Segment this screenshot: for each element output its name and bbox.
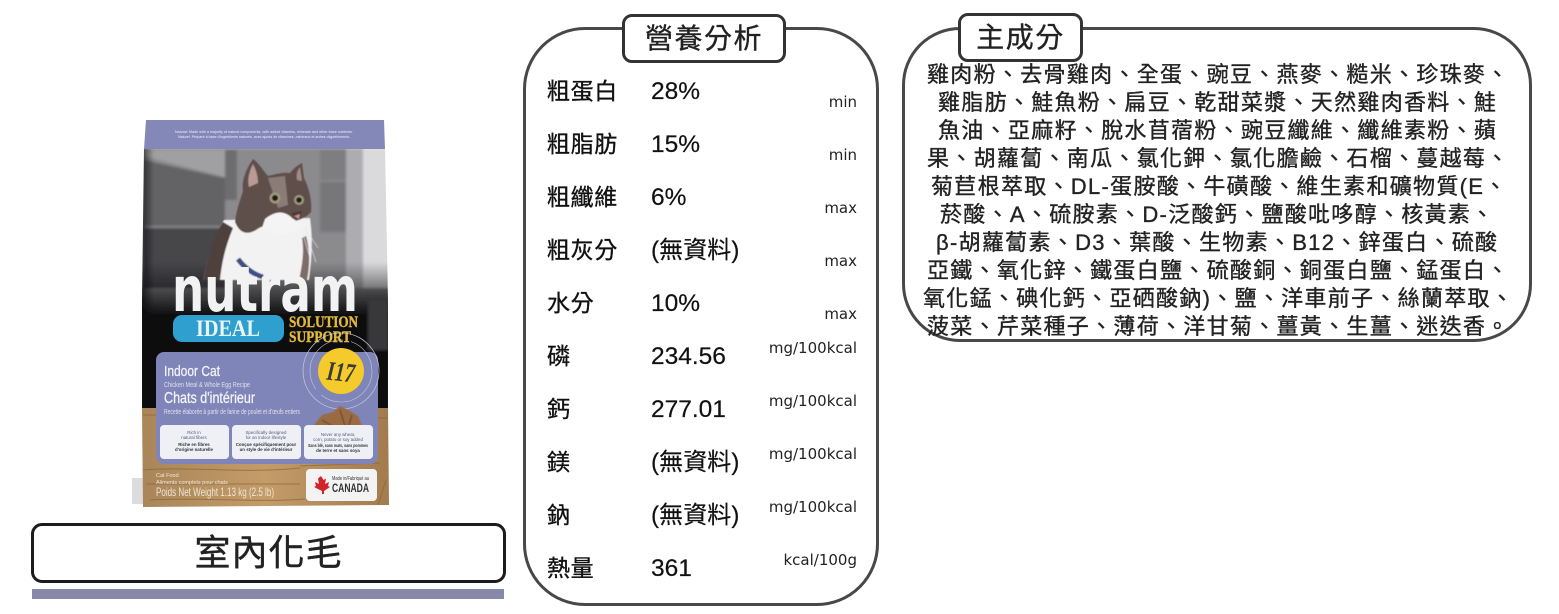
ingredients text	[923, 62, 1514, 339]
row: protein	[547, 78, 857, 111]
solution support: SOLUTION	[289, 314, 358, 331]
recipe panel: Indoor Cat	[164, 363, 221, 380]
row: ash: (無資料)	[651, 237, 739, 264]
made in Canada label: CANADA	[332, 481, 369, 495]
ingredients text: β-胡蘿蔔素、D3、葉酸、生物素、B12、鋅蛋白、硫酸	[936, 230, 1498, 255]
made in Canada label	[306, 469, 377, 501]
ingredients text: 菸酸、A、硫胺素、D-泛酸鈣、鹽酸吡哆醇、核黃素、	[940, 202, 1494, 227]
row: fiber: 粗纖維	[547, 184, 618, 210]
benefit cards: d'origine naturelle	[175, 447, 213, 452]
I17 badge: I17	[325, 356, 357, 388]
row: ash: max	[824, 252, 857, 270]
row: moisture: max	[824, 305, 857, 323]
product name box	[31, 523, 506, 583]
row: moisture: 10%	[651, 290, 700, 317]
benefit cards: corn, potato or soy added	[313, 437, 363, 442]
benefit cards: Specifically designed	[245, 430, 287, 435]
ingredients text: 氧化錳、碘化鈣、亞硒酸鈉)、鹽、洋車前子、絲蘭萃取、	[923, 286, 1514, 311]
row: fat: 15%	[651, 131, 700, 158]
photo background	[140, 148, 390, 414]
recipe panel: Chats d'intérieur	[164, 390, 256, 407]
purple bar under name	[32, 589, 504, 599]
row: calories: kcal/100g	[784, 551, 857, 569]
row: fat	[547, 131, 857, 164]
panel outline	[902, 27, 1532, 342]
benefit cards: natural fibers	[181, 435, 207, 440]
ingredients text: 果、胡蘿蔔、南瓜、氯化鉀、氯化膽鹼、石榴、蔓越莓、	[927, 146, 1510, 171]
heading: nutrition analysis	[622, 14, 786, 63]
row: fiber	[547, 184, 857, 217]
product bag illustration	[132, 120, 389, 507]
top purple band: Natural: Made with a majority of natural components, with added vitamins, minerals and other trace nutrients.	[175, 130, 353, 134]
ingredients text: 魚油、亞麻籽、脫水苜蓿粉、豌豆纖維、纖維素粉、蘋	[938, 118, 1497, 143]
ingredients text: 雞肉粉、去骨雞肉、全蛋、豌豆、燕麥、糙米、珍珠麥、	[927, 62, 1510, 87]
panel outline	[523, 27, 879, 606]
benefit cards: Conçue spécifiquement pour	[236, 442, 297, 447]
row: fat: min	[829, 146, 857, 164]
row: sodium: (無資料)	[651, 502, 739, 529]
row: phosphorus: 磷	[547, 343, 571, 369]
row: phosphorus: 234.56	[651, 343, 726, 370]
heading: main ingredients: 主成分	[976, 22, 1065, 53]
row: calcium: 鈣	[547, 396, 571, 422]
ingredients text: 菊苣根萃取、DL-蛋胺酸、牛磺酸、維生素和礦物質(E、	[931, 174, 1508, 199]
row: protein: 28%	[651, 78, 700, 105]
I17 badge	[303, 333, 379, 409]
row: fiber: max	[824, 199, 857, 217]
wood base	[142, 408, 389, 507]
net weight text: Cat Food	[156, 473, 179, 479]
row: fiber: 6%	[651, 184, 686, 211]
ingredients text: 亞鐵、氧化鋅、鐵蛋白鹽、硫酸銅、銅蛋白鹽、錳蛋白、	[927, 258, 1510, 283]
benefit cards: de terre et sans soya	[316, 448, 360, 453]
panel: nutrition analysis	[523, 14, 879, 606]
panel: main ingredients	[902, 13, 1532, 342]
benefit cards	[160, 425, 373, 459]
kibble	[314, 406, 363, 432]
IDEAL pill	[173, 315, 284, 342]
row: magnesium: 鎂	[547, 449, 571, 475]
row: moisture: 水分	[547, 290, 594, 316]
benefit cards: Rich in	[187, 430, 201, 435]
product name box: 室內化毛	[194, 532, 342, 573]
row: moisture	[547, 290, 857, 323]
top purple band: Naturel: Préparé à base d'ingrédients naturels, avec ajouts de vitamines, minéraux et autres oligoéléments.	[178, 135, 350, 139]
benefit cards: Sans blé, sans maïs, sans pommes	[308, 443, 368, 448]
row: protein: 粗蛋白	[547, 78, 618, 104]
row: phosphorus: mg/100kcal	[769, 339, 857, 357]
row: calcium	[547, 392, 857, 423]
row: sodium	[547, 498, 857, 529]
IDEAL pill: IDEAL	[196, 316, 260, 341]
row: ash: 粗灰分	[547, 237, 618, 263]
row: sodium: 鈉	[547, 502, 571, 528]
benefit cards: Riche en fibres	[178, 442, 210, 447]
recipe panel	[156, 352, 378, 464]
net weight text: Aliments complets pour chats	[156, 480, 228, 486]
row: calories: 361	[651, 555, 692, 582]
heading: nutrition analysis: 營養分析	[645, 23, 763, 54]
cat	[203, 159, 318, 280]
benefit cards: un style de vie d'intérieur	[240, 447, 293, 452]
benefit cards: for an indoor lifestyle	[246, 435, 287, 440]
row: ash	[547, 237, 857, 270]
solution support	[289, 314, 358, 346]
ingredients text: 雞脂肪、鮭魚粉、扁豆、乾甜菜漿、天然雞肉香料、鮭	[938, 90, 1497, 115]
row: calories: 熱量	[547, 555, 594, 581]
benefit cards: Never any wheat,	[321, 432, 355, 437]
net weight text	[156, 473, 274, 499]
recipe panel: Recette élaborée à partir de farine de poulet et d'œufs entiers	[164, 409, 300, 416]
row: phosphorus	[547, 339, 857, 370]
row: magnesium: (無資料)	[651, 449, 739, 476]
row: calcium: 277.01	[651, 396, 726, 423]
heading: main ingredients	[958, 13, 1083, 62]
row: magnesium	[547, 445, 857, 476]
made in Canada label: Made in/Fabriqué au	[332, 476, 369, 482]
solution support: SUPPORT	[289, 329, 351, 346]
net weight text: Poids Net Weight 1.13 kg (2.5 lb)	[156, 485, 274, 499]
shadow at bag left	[132, 478, 144, 504]
row: fat: 粗脂肪	[547, 131, 618, 157]
row: calories	[547, 551, 857, 582]
top purple band	[144, 120, 385, 149]
row: sodium: mg/100kcal	[769, 498, 857, 516]
ingredients text: 菠菜、芹菜種子、薄荷、洋甘菊、薑黃、生薑、迷迭香。	[927, 314, 1510, 339]
recipe panel: Chicken Meal & Whole Egg Recipe	[164, 380, 250, 389]
row: calcium: mg/100kcal	[769, 392, 857, 410]
row: magnesium: mg/100kcal	[769, 445, 857, 463]
row: protein: min	[829, 93, 857, 111]
